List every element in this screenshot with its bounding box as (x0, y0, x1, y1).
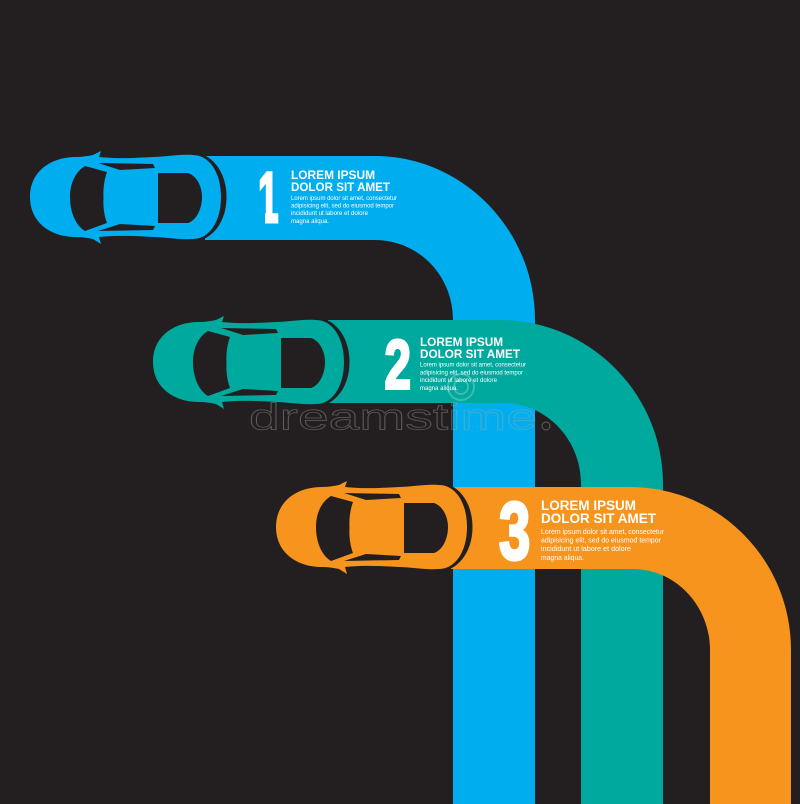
step 3 text: adipisicing elit, sed do eiusmod tempor (541, 536, 662, 544)
car: orange (276, 481, 472, 574)
step 3 text: DOLOR SIT AMET (541, 511, 657, 526)
car: blue (30, 151, 226, 244)
step 2 text: incididunt ut labore et dolore (420, 377, 497, 384)
road: blue (205, 156, 535, 804)
step 2 text (384, 325, 527, 404)
step 2 text: Lorem ipsum dolor sit amet, consectetur (420, 362, 527, 368)
step 2 text: adipisicing elit, sed do eiusmod tempor (420, 370, 524, 376)
step 1 text: adipisicing elit, sed do eiusmod tempor (291, 202, 395, 210)
step 1 text: DOLOR SIT AMET (291, 180, 391, 194)
step 2 text: DOLOR SIT AMET (420, 347, 521, 361)
step 2 text: LOREM IPSUM (420, 335, 503, 349)
car: teal (153, 316, 350, 409)
step 1 text: magna aliqua. (291, 218, 329, 225)
step 3 text: 3 (499, 486, 530, 576)
step 3 text: incididunt ut labore et dolore (541, 544, 631, 553)
road: teal (328, 320, 663, 804)
step 1 text: 1 (258, 158, 279, 237)
step 3 text: LOREM IPSUM (541, 498, 636, 513)
step 2 text: 2 (384, 325, 411, 404)
step 3 text (499, 486, 665, 576)
step 3 text: Lorem ipsum dolor sit amet, consectetur (541, 527, 665, 536)
watermark: dreamstime (249, 396, 537, 438)
watermark (249, 374, 550, 438)
step 1 text: LOREM IPSUM (291, 168, 375, 182)
step 1 text (255, 158, 398, 237)
step 1 text: incididunt ut labore et dolore (291, 210, 368, 217)
step 1 text: Lorem ipsum dolor sit amet, consectetur (291, 195, 398, 202)
road: orange (451, 487, 791, 804)
step 3 text: magna aliqua. (541, 553, 584, 562)
step 2 text: magna aliqua. (420, 385, 458, 392)
